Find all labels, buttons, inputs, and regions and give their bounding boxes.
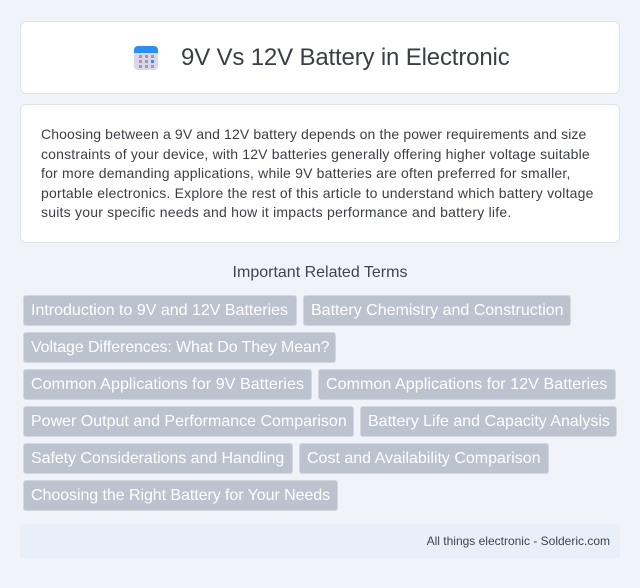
header card [20, 21, 620, 94]
intro text panel [20, 104, 620, 243]
intro paragraph: Choosing between a 9V and 12V battery depends on the power requirements and size [41, 126, 586, 142]
icon: calendar grid [134, 46, 158, 70]
intro paragraph: portable electronics. Explore the rest of this article to understand which battery voltage [41, 184, 594, 200]
footer text: All things electronic - Solderic.com [427, 534, 610, 548]
intro paragraph: for more demanding applications, while 9V batteries are often preferred for smaller, [41, 165, 571, 181]
tag: safety: Safety Considerations and Handling [31, 450, 284, 467]
tag: chemistry: Battery Chemistry and Construction [311, 302, 564, 319]
tag: 9V applications: Common Applications for 9V Batteries [31, 376, 304, 393]
related terms heading: Important Related Terms [233, 264, 407, 281]
tag: voltage [23, 332, 336, 363]
footer bar [20, 524, 620, 558]
tag: battery life [360, 406, 617, 437]
intro paragraph [41, 126, 594, 220]
tag: cost: Cost and Availability Comparison [307, 450, 541, 467]
tag list [23, 295, 617, 511]
tag: introduction [23, 295, 297, 326]
tag: choosing: Choosing the Right Battery for Your Needs [31, 487, 330, 504]
intro paragraph: suits your specific needs and how it impacts performance and battery life. [41, 204, 511, 220]
tag: voltage: Voltage Differences: What Do They Mean? [31, 339, 329, 356]
tag: battery life: Battery Life and Capacity Analysis [368, 413, 610, 430]
tag: choosing [23, 480, 338, 511]
intro paragraph: constraints of your device, with 12V batteries generally offering higher voltage suitable [41, 146, 590, 162]
tag: chemistry [303, 295, 571, 326]
title: 9V Vs 12V Battery in Electronic [181, 44, 510, 71]
tag: power output [23, 406, 354, 437]
tag: 12V applications: Common Applications for 12V Batteries [326, 376, 607, 393]
tag: cost [299, 443, 549, 474]
tag: power output: Power Output and Performance Comparison [31, 413, 347, 430]
tag: safety [23, 443, 293, 474]
tag: introduction: Introduction to 9V and 12V Batteries [31, 302, 288, 319]
tag: 12V applications [318, 369, 616, 400]
tag: 9V applications [23, 369, 312, 400]
